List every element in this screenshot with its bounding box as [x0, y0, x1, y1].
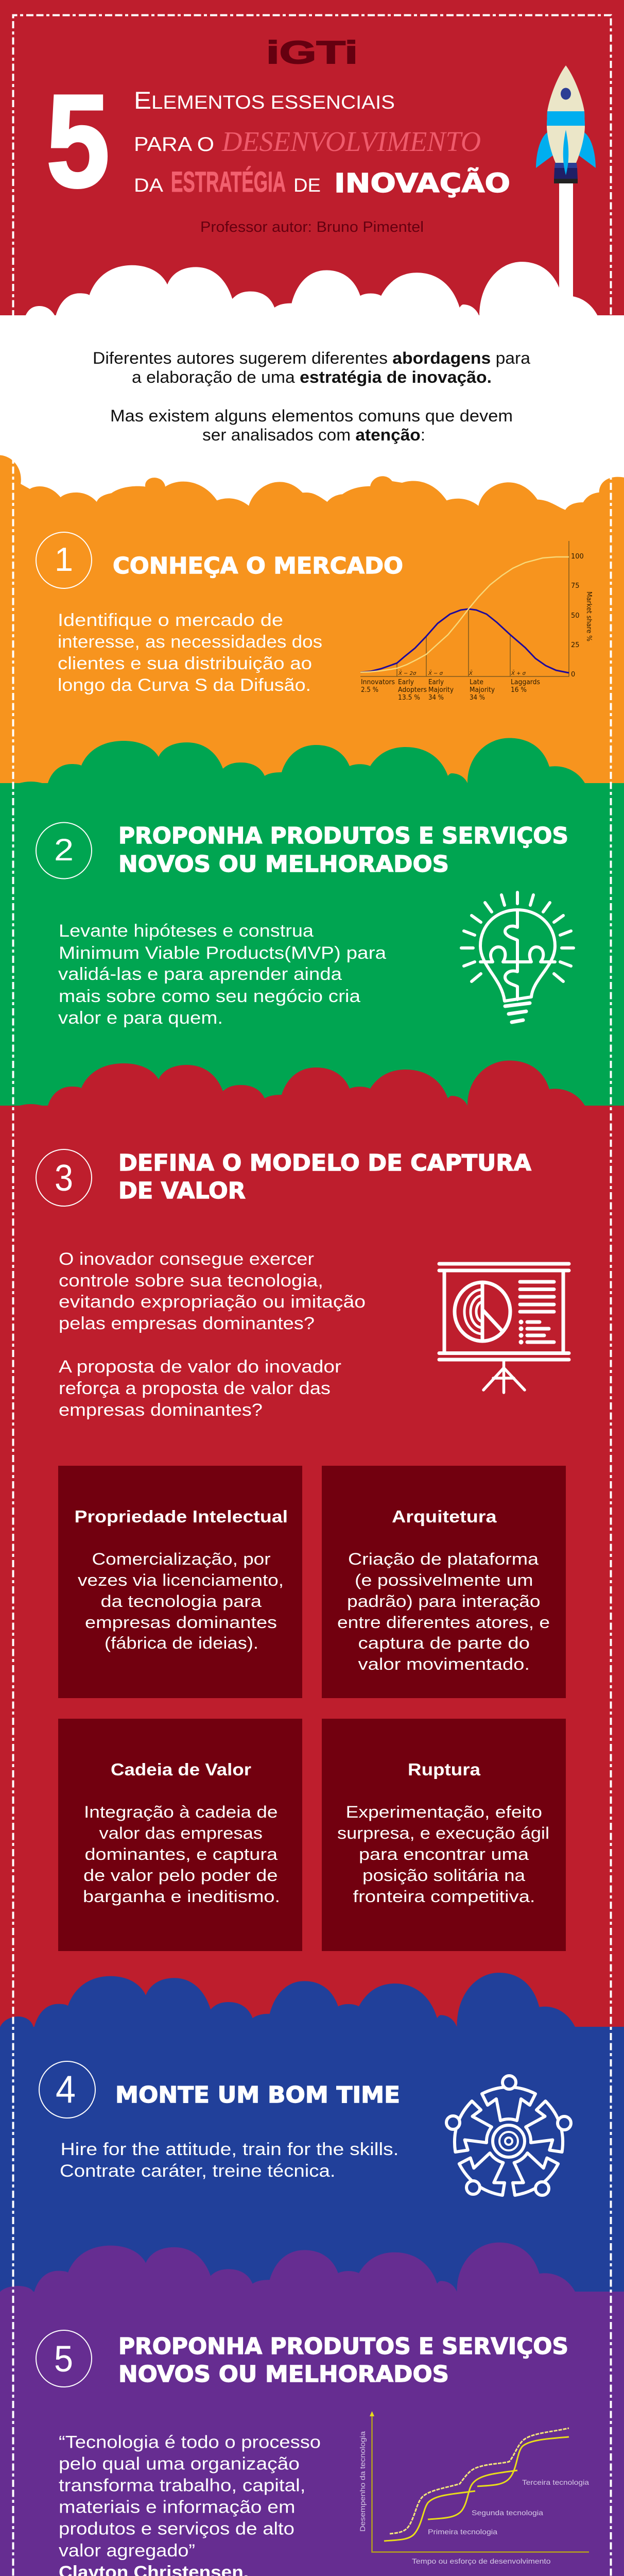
quote text: “Tecnologia é todo o processo	[59, 2433, 321, 2452]
heading: CONHEÇA O MERCADO	[113, 553, 403, 579]
number badge 2: 2	[54, 833, 74, 867]
chart: diffusion curve: Majority	[470, 686, 495, 694]
body text	[58, 921, 386, 1028]
body text: A proposta de valor do inovador	[59, 1357, 341, 1377]
body text: Contrate caráter, treine técnica.	[60, 2161, 336, 2181]
title: DA	[134, 175, 163, 196]
chart: technology s-curves: Segunda tecnologia	[472, 2509, 543, 2517]
chart: diffusion curve: 16 %	[511, 686, 527, 694]
body text: controle sobre sua tecnologia,	[59, 1271, 323, 1291]
quote text: transforma trabalho, capital,	[59, 2476, 306, 2496]
body text: pelas empresas dominantes?	[59, 1314, 315, 1333]
card: ruptura: surpresa, e execução ágil	[337, 1824, 549, 1842]
card: cadeia de valor	[58, 1719, 302, 1951]
body text: Levante hipóteses e construa	[59, 921, 314, 941]
card: propriedade intelectual: empresas dominantes	[85, 1613, 277, 1632]
body text: empresas dominantes?	[59, 1400, 263, 1420]
chart: technology s-curves: Desempenho da tecnologia	[358, 2431, 367, 2532]
icon: light bulb puzzle	[461, 892, 574, 1022]
heading: NOVOS OU MELHORADOS	[118, 851, 449, 877]
panel: header	[0, 0, 624, 317]
logo: iGTi	[266, 35, 358, 71]
chart: diffusion curve: 13.5 %	[398, 694, 420, 702]
panel: 1 conheça o mercado	[0, 455, 624, 786]
card: arquitetura: entre diferentes atores, e	[337, 1613, 550, 1632]
panel: 2 proponha produtos	[0, 738, 624, 1108]
chart: diffusion curve: Laggards	[511, 679, 540, 686]
chart: diffusion curve: Late	[470, 679, 483, 686]
card: arquitetura: (e possivelmente um	[355, 1571, 533, 1589]
heading	[118, 1150, 531, 1204]
title: DE	[293, 175, 321, 196]
number badge 4: 4	[56, 2067, 76, 2111]
card: propriedade intelectual: da tecnologia para	[101, 1592, 262, 1611]
card: cadeia de valor: dominantes, e captura	[84, 1845, 278, 1863]
number badge 5: 5	[54, 2339, 73, 2380]
chart: technology s-curves: Terceira tecnologia	[522, 2478, 589, 2486]
chart: diffusion curve: 25	[571, 641, 580, 649]
body text: longo da Curva S da Difusão.	[58, 675, 311, 695]
chart: diffusion curve: Early	[428, 679, 444, 686]
text block: introduction	[93, 349, 530, 444]
panel: 4 monte um bom time	[0, 1973, 624, 2300]
icon: team network	[446, 2076, 571, 2201]
body text: interesse, as necessidades dos	[58, 632, 322, 652]
number badge 1	[36, 532, 92, 588]
card: arquitetura: Arquitetura	[392, 1507, 497, 1526]
chart: diffusion curve: Market share %	[585, 591, 593, 641]
chart: diffusion curve: Early	[398, 679, 414, 686]
card: cadeia de valor: de valor pelo poder de	[83, 1866, 278, 1885]
card: propriedade intelectual	[58, 1466, 302, 1698]
rocket trail	[559, 180, 573, 299]
chart: diffusion curve: 34 %	[470, 694, 485, 702]
author: Professor autor: Bruno Pimentel	[200, 219, 424, 235]
quote text: produtos e serviços de alto	[59, 2519, 294, 2539]
chart: technology s-curves	[358, 2411, 589, 2565]
heading: PROPONHA PRODUTOS E SERVIÇOS	[118, 823, 568, 849]
header cloud	[0, 262, 624, 317]
body text	[59, 1249, 366, 1420]
body text: Identifique o mercado de	[58, 611, 283, 630]
chart: diffusion curve: X̄ − 2σ	[398, 670, 417, 676]
card: arquitetura	[322, 1466, 566, 1698]
chart: technology s-curves: Tempo ou esforço de desenvolvimento	[412, 2557, 551, 2565]
card: arquitetura: Criação de plataforma	[348, 1550, 539, 1568]
big number five: 5	[46, 67, 110, 215]
icon: presentation board	[439, 1264, 569, 1393]
chart: diffusion curve: 50	[571, 612, 580, 620]
heading: DE VALOR	[118, 1178, 246, 1204]
panel: 5 proponha produtos	[0, 2243, 624, 2576]
card: ruptura: fronteira competitiva.	[353, 1887, 535, 1906]
card: arquitetura: valor movimentado.	[358, 1655, 530, 1673]
text block: introduction: Diferentes autores sugerem diferentes abordagens para	[93, 349, 530, 367]
title: DESENVOLVIMENTO	[221, 126, 481, 157]
chart: diffusion curve: 75	[571, 582, 580, 590]
text block: introduction: ser analisados com atenção:	[202, 426, 425, 444]
number badge 3: 3	[55, 1158, 73, 1199]
text block: introduction: a elaboração de uma estratégia de inovação.	[132, 368, 492, 386]
body text: evitando expropriação ou imitação	[59, 1292, 366, 1312]
body text	[58, 611, 322, 695]
chart: diffusion curve: 100	[571, 553, 584, 561]
body text: validá-las e para aprender ainda	[58, 964, 342, 984]
body text: valor e para quem.	[58, 1008, 223, 1028]
card: cadeia de valor: Cadeia de Valor	[111, 1760, 251, 1779]
title: ELEMENTOS ESSENCIAIS	[134, 87, 395, 114]
number badge 4	[39, 2061, 95, 2118]
body text: mais sobre como seu negócio cria	[59, 987, 360, 1006]
heading: DEFINA O MODELO DE CAPTURA	[118, 1150, 531, 1176]
title	[134, 87, 510, 199]
card: ruptura: Experimentação, efeito	[346, 1803, 542, 1821]
quote text	[59, 2433, 321, 2576]
chart: diffusion curve: X̄ + σ	[511, 670, 526, 676]
heading	[118, 2333, 568, 2387]
card: ruptura: posição solitária na	[362, 1866, 525, 1885]
quote text: valor agregado”	[59, 2541, 195, 2561]
card: ruptura: para encontrar uma	[359, 1845, 529, 1863]
card: arquitetura: captura de parte do	[358, 1634, 530, 1652]
chart: diffusion curve: X̄	[469, 670, 473, 676]
number badge 3	[36, 1149, 92, 1206]
number badge 5	[36, 2330, 92, 2387]
body text: reforça a proposta de valor das	[59, 1379, 331, 1398]
body text: Minimum Viable Products(MVP) para	[59, 943, 386, 963]
chart: diffusion curve: 0	[571, 671, 575, 679]
title: INOVAÇÃO	[334, 167, 510, 199]
chart: diffusion curve: Adopters	[398, 686, 427, 694]
body text	[60, 2140, 398, 2181]
card: ruptura: Ruptura	[408, 1760, 481, 1779]
body text: Hire for the attitude, train for the skills.	[61, 2140, 398, 2159]
chart: diffusion curve: Innovators	[361, 679, 395, 686]
card: cadeia de valor: barganha e ineditismo.	[83, 1887, 280, 1906]
number badge 1: 1	[55, 540, 73, 578]
icon: rocket	[536, 65, 596, 183]
chart: diffusion curve: 34 %	[428, 694, 444, 702]
quote text: materiais e informação em	[59, 2498, 296, 2517]
card: arquitetura: padrão) para interação	[347, 1592, 541, 1611]
chart: technology s-curves: Primeira tecnologia	[428, 2528, 497, 2536]
card: cadeia de valor: valor das empresas	[99, 1824, 263, 1842]
text block: introduction: Mas existem alguns elementos comuns que devem	[110, 406, 513, 425]
chart: diffusion curve	[360, 541, 593, 702]
title: PARA O	[134, 133, 214, 156]
card: cadeia de valor: Integração à cadeia de	[84, 1803, 278, 1821]
body text: O inovador consegue exercer	[59, 1249, 314, 1269]
card: propriedade intelectual: vezes via licenciamento,	[78, 1571, 284, 1589]
chart: diffusion curve: X̄ − σ	[428, 670, 443, 676]
panel: 3 modelo de captura de valor	[0, 1060, 624, 2033]
chart: diffusion curve: 2.5 %	[361, 686, 378, 694]
card: ruptura	[322, 1719, 566, 1951]
card: propriedade intelectual: (fábrica de ideias).	[105, 1634, 258, 1652]
card: propriedade intelectual: Propriedade Intelectual	[74, 1507, 288, 1526]
card: propriedade intelectual: Comercialização, por	[92, 1550, 271, 1568]
number badge 2	[36, 822, 92, 879]
heading: PROPONHA PRODUTOS E SERVIÇOS	[118, 2333, 568, 2360]
title: ESTRATÉGIA	[171, 165, 286, 198]
heading: NOVOS OU MELHORADOS	[118, 2361, 449, 2387]
quote text: pelo qual uma organização	[59, 2454, 300, 2474]
heading: MONTE UM BOM TIME	[115, 2082, 400, 2108]
chart: diffusion curve: Majority	[428, 686, 454, 694]
heading	[118, 823, 568, 877]
body text: clientes e sua distribuição ao	[58, 654, 312, 673]
